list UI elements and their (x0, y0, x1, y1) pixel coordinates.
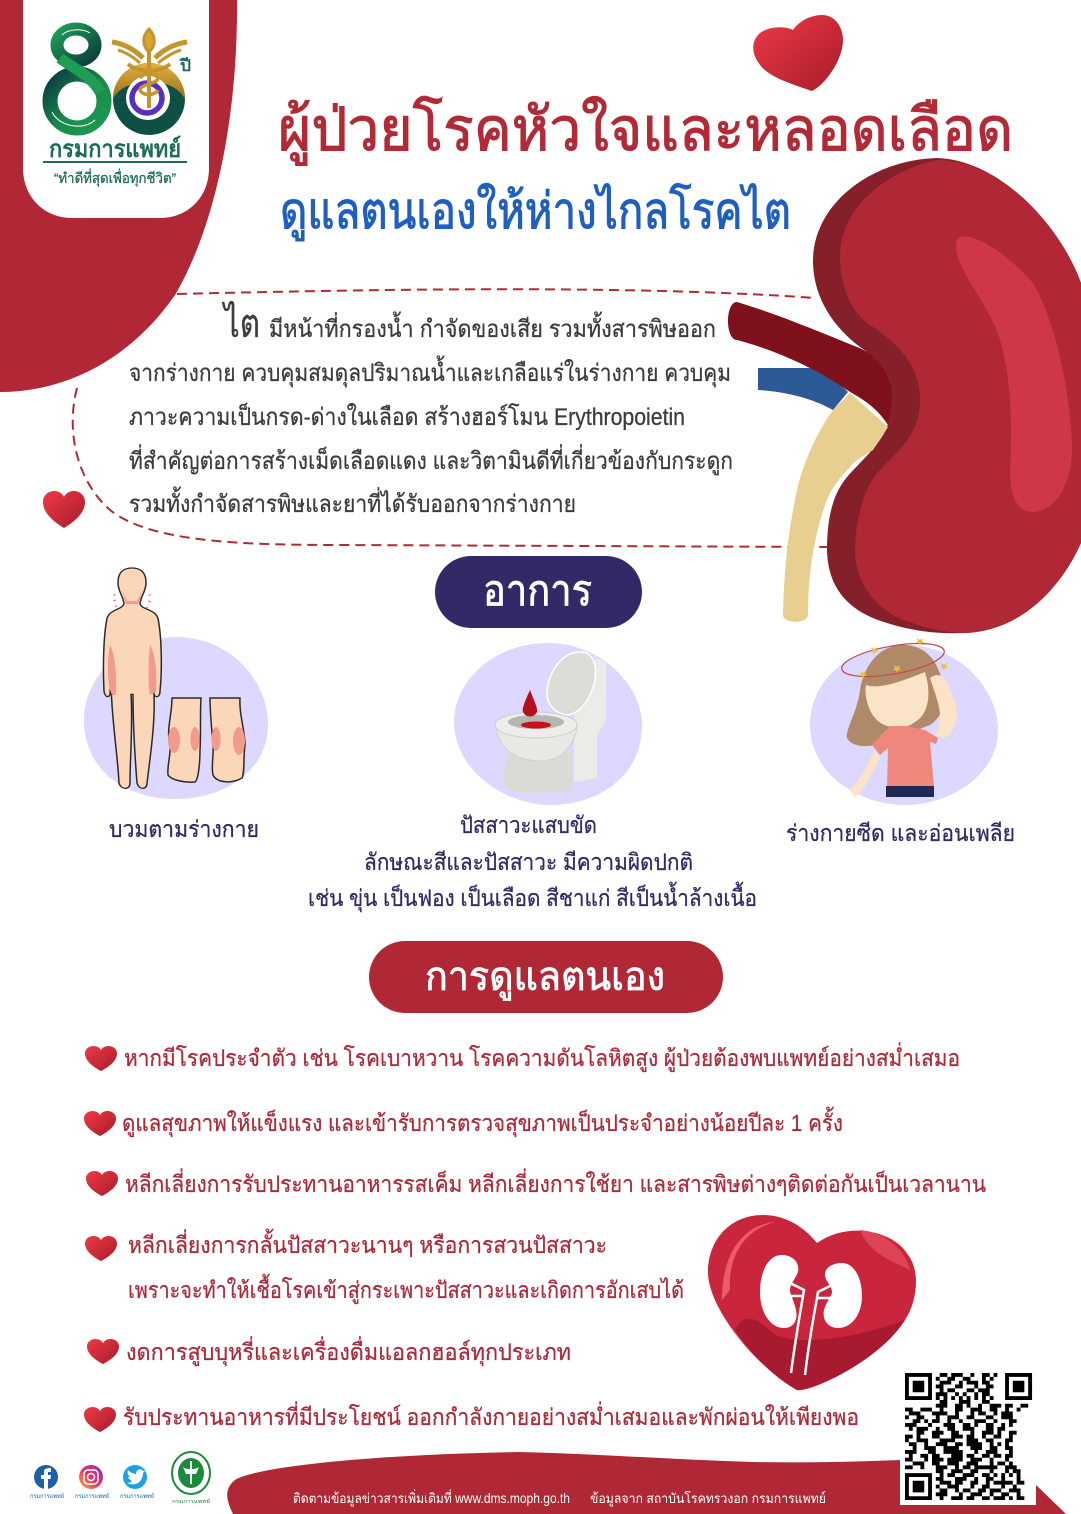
kidney body (840, 160, 1081, 633)
item 4 (85, 1229, 684, 1304)
social icons (30, 1452, 210, 1505)
text: department name: กรมการแพทย์ (49, 135, 181, 163)
line 1: มีหน้าที่กรองน้ำ กำจัดของเสีย รวมทั้งสารพิษออก (269, 311, 716, 343)
icon: twitter (120, 1465, 154, 1500)
QR code (900, 1370, 1036, 1505)
item 2: ดูแลสุขภาพให้แข็งแรง และเข้ารับการตรวจสุขภาพเป็นประจำอย่างน้อยปีละ 1 ครั้ง (122, 1107, 843, 1137)
icon: ministry seal: กรมการแพทย์ (172, 1498, 210, 1505)
item 5: งดการสูบบุหรี่และเครื่องดื่มแอลกฮอล์ทุกประเภท (126, 1336, 571, 1366)
footer text: ข้อมูลจาก สถาบันโรคทรวงอก กรมการแพทย์ (590, 1490, 826, 1507)
icon: caduceus emblem (112, 29, 187, 108)
icon: facebook (30, 1465, 64, 1500)
item 4: เพราะจะทำให้เชื้อโรคเข้าสู่กระเพาะปัสสาวะและเกิดการอักเสบได้ (128, 1274, 684, 1304)
text block: kidney function (129, 301, 733, 518)
symptom label: pale and weak: ร่างกายซีด และอ่อนเพลีย (786, 820, 1015, 846)
kidney highlight (956, 236, 1072, 512)
icon: kidney illustration (728, 158, 1081, 633)
title: ผู้ป่วยโรคหัวใจและหลอดเลือด (278, 95, 1013, 166)
text: years: ปี (178, 56, 191, 75)
icon: facebook: กรมการแพทย์ (30, 1492, 64, 1500)
item 6: รับประทานอาหารที่มีประโยชน์ ออกกำลังกายอย่างสม่ำเสมอและพักผ่อนให้เพียงพอ (123, 1401, 859, 1430)
symptom label: urination: ลักษณะสีและปัสสาวะ มีความผิดปกติ (364, 849, 693, 875)
symptom label: urination (308, 812, 757, 912)
icon: instagram (75, 1465, 109, 1500)
heading: symptoms: อาการ (483, 567, 592, 614)
corner red shape (0, 0, 237, 392)
icon: dizzy girl (810, 637, 998, 805)
ureter (783, 393, 888, 622)
footer band (227, 1452, 1066, 1514)
list: self care items (84, 1042, 986, 1432)
item 1: หากมีโรคประจำตัว เช่น โรคเบาหวาน โรคความดันโลหิตสูง ผู้ป่วยต้องพบแพทย์อย่างสม่ำเสมอ (124, 1042, 960, 1072)
dashed frame (73, 289, 827, 547)
icon: small heart (43, 491, 85, 528)
item 4: หลีกเลี่ยงการกลั้นปัสสาวะนานๆ หรือการสวนปัสสาวะ (128, 1229, 607, 1258)
symptom label: swelling: บวมตามร่างกาย (109, 816, 259, 842)
icon: heart with kidneys (708, 1215, 916, 1390)
line 4: ที่สำคัญต่อการสร้างเม็ดเลือดแดง และวิตามินดีที่เกี่ยวข้องกับกระดูก (129, 444, 733, 476)
icon: ministry seal (172, 1452, 210, 1505)
icon: number 0 (113, 63, 185, 135)
icon: instagram: กรมการแพทย์ (75, 1492, 109, 1500)
subtitle: ดูแลตนเองให้ห่างไกลโรคไต (280, 183, 791, 241)
symptom label: urination: ปัสสาวะแสบขัด (460, 812, 597, 838)
heading: symptoms (435, 556, 642, 628)
line 3: ภาวะความเป็นกรด-ด่างในเลือด สร้างฮอร์โมน Erythropoietin (129, 402, 685, 431)
renal vein (758, 368, 848, 410)
icon: top heart (753, 15, 843, 91)
heading: self care (369, 941, 723, 1013)
icon: number 8 (50, 29, 104, 128)
word: kidney: ไต (222, 301, 260, 346)
renal artery (728, 302, 893, 425)
heading: self care: การดูแลตนเอง (425, 955, 665, 1000)
icon: toilet with blood (454, 643, 642, 805)
body figure (103, 568, 161, 788)
symptom label: urination: เช่น ขุ่น เป็นฟอง เป็นเลือด สีชาแก่ สีเป็นน้ำล้างเนื้อ (308, 882, 757, 912)
footer text (293, 1489, 826, 1507)
kidney body shadow (813, 158, 1081, 633)
icon: twitter: กรมการแพทย์ (120, 1492, 154, 1500)
panel: logo (23, 0, 209, 218)
text: slogan: “ทำดีที่สุดเพื่อทุกชีวิต” (54, 169, 176, 187)
item 3: หลีกเลี่ยงการรับประทานอาหารรสเค็ม หลีกเลี่ยงการใช้ยา และสารพิษต่างๆติดต่อกันเป็นเวลานาน (125, 1168, 986, 1197)
icon: swollen body (84, 568, 268, 799)
line 2: จากร่างกาย ควบคุมสมดุลปริมาณน้ำและเกลือแร่ในร่างกาย ควบคุม (129, 355, 731, 388)
footer text: ติดตามข้อมูลข่าวสารเพิ่มเติมที่ www.dms.moph.go.th (293, 1489, 570, 1507)
line 5: รวมทั้งกำจัดสารพิษและยาที่ได้รับออกจากร่างกาย (129, 486, 576, 518)
swollen feet (168, 698, 201, 782)
